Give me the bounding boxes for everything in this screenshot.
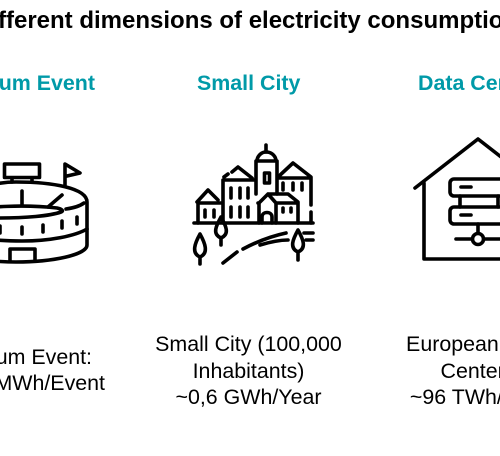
text: small city: ~0,6 GWh/Year (175, 385, 322, 409)
text: small city: Small City (100,000 (155, 332, 342, 356)
text: data center (406, 332, 500, 409)
text: small city (155, 332, 342, 409)
text: stadium event (0, 345, 105, 395)
heading: small city: Small City (197, 71, 300, 95)
text: small city: Inhabitants) (193, 358, 304, 382)
